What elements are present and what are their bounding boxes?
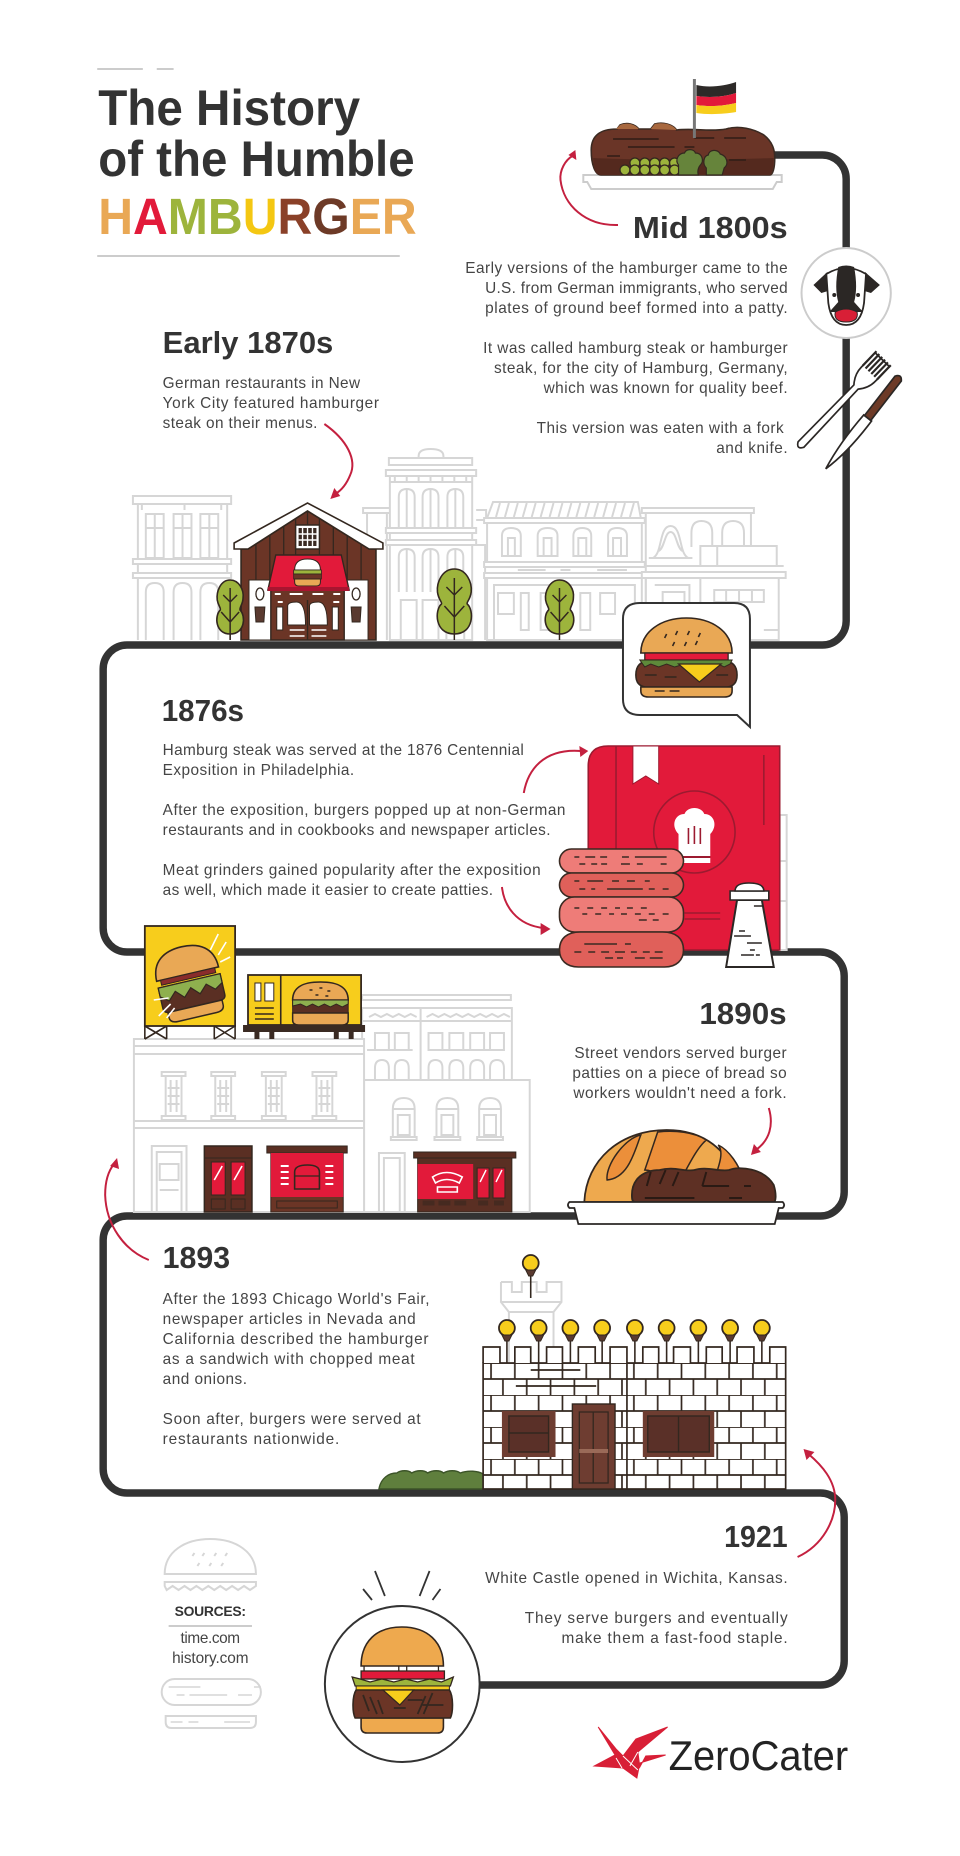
sources list: [172, 1630, 248, 1667]
icon: plate: [568, 1202, 784, 1224]
window: [296, 525, 319, 549]
title: [98, 80, 417, 245]
text: 1921 body: White Castle opened in Wichita, Kansas.: [485, 1570, 788, 1587]
illustration: storefronts, 1890s: [204, 1146, 516, 1212]
text: 1893 body: and onions.: [163, 1371, 247, 1388]
text: 1876s body: as well, which made it easier to create patties.: [163, 882, 493, 899]
speech bubble with burger: [623, 603, 750, 727]
arrow: to bread: [751, 1108, 771, 1155]
tower: [501, 1282, 561, 1362]
trees: [217, 569, 574, 640]
decorative top dashes: [97, 68, 174, 70]
text: Mid 1800s body: This version was eaten with a fork: [537, 420, 784, 437]
illustration: White Castle: [379, 1255, 786, 1489]
icon: crane: [594, 1727, 668, 1778]
icon: burger in circle with rays: [325, 1571, 480, 1762]
text: 1890s body: [572, 1045, 787, 1102]
text: 1876s body: Exposition in Philadelphia.: [163, 762, 354, 779]
text: 1893 body: California described the hamburger: [163, 1331, 429, 1348]
timeline path: [103, 155, 846, 1685]
text: Mid 1800s body: U.S. from German immigrants, who served: [485, 280, 788, 297]
storefront: red sign with door: [414, 1152, 516, 1212]
illustration: salt shaker: [726, 883, 774, 967]
text: 1876s body: [163, 742, 565, 899]
text: 1876s body: After the exposition, burgers popped up at non-German: [163, 802, 565, 819]
arrow: to storefronts: [105, 1158, 149, 1260]
arrow: to steak: [560, 150, 618, 225]
text: 1876s body: Hamburg steak was served at the 1876 Centennial: [163, 742, 524, 759]
text: 1890s body: workers wouldn't need a fork.: [572, 1085, 787, 1102]
text: 1893 body: Soon after, burgers were served at: [163, 1411, 421, 1428]
title word: HAMBURGER: HAMBURGER: [98, 188, 417, 245]
sources list: history.com: [172, 1650, 248, 1667]
illustration: patty on bread: [568, 1130, 784, 1224]
heading: 1921: 1921: [724, 1519, 788, 1554]
text: 1893 body: newspaper articles in Nevada and: [163, 1311, 416, 1328]
text: Early 1870s body: [163, 375, 379, 432]
entrance doors: [271, 590, 344, 640]
arrow: to castle: [798, 1449, 835, 1557]
text: 1921 body: make them a fast-food staple.: [561, 1630, 788, 1647]
title: of the Humble: [98, 131, 415, 187]
text: Mid 1800s body: It was called hamburg steak or hamburger: [483, 340, 788, 357]
arrow: to restaurant: [324, 424, 352, 499]
text: Early 1870s body: German restaurants in New: [163, 375, 361, 392]
text: Mid 1800s body: and knife.: [716, 440, 788, 457]
illustration: steak on plate with German flag: [583, 79, 782, 189]
logo: ZeroCater: [594, 1727, 848, 1779]
heading: 1890s: 1890s: [699, 996, 787, 1031]
text: Early 1870s body: York City featured hamburger: [163, 395, 379, 412]
text: 1921 body: They serve burgers and eventually: [525, 1610, 788, 1627]
icon: fork and knife: [791, 351, 904, 473]
text: 1893 body: as a sandwich with chopped meat: [163, 1351, 415, 1368]
text: 1890s body: Street vendors served burger: [574, 1045, 787, 1062]
icon: grey bun top: [165, 1539, 256, 1590]
text: Mid 1800s body: steak, for the city of Hamburg, Germany,: [494, 360, 788, 377]
text: 1876s body: restaurants and in cookbooks and newspaper articles.: [163, 822, 551, 839]
text: 1876s body: Meat grinders gained popularity after the exposition: [163, 862, 541, 879]
illustration: stack of patties: [559, 849, 683, 967]
heading: 1876s: 1876s: [162, 693, 244, 728]
icon: grey bun bottom: [162, 1679, 261, 1728]
icon: cow in circle: [802, 248, 891, 338]
heading: 1893: 1893: [163, 1240, 230, 1275]
icon: broccoli: [677, 150, 727, 175]
text: 1893 body: After the 1893 Chicago World's Fair,: [163, 1291, 430, 1308]
sources panel: [162, 1539, 261, 1728]
icon: plate: [583, 175, 782, 189]
billboard: yellow burger sign: [145, 926, 235, 1039]
icon: peas: [620, 158, 680, 175]
text: 1921 body: [485, 1570, 788, 1647]
infographic canvas: [97, 69, 904, 1779]
bush: [379, 1471, 483, 1489]
text: 1893 body: restaurants nationwide.: [163, 1431, 339, 1448]
illustration: red-awning restaurant: [234, 503, 383, 640]
text: Mid 1800s body: Early versions of the hamburger came to the: [465, 260, 788, 277]
storefront: door: [204, 1146, 252, 1212]
heading: Mid 1800s: Mid 1800s: [633, 210, 788, 245]
logo wordmark: ZeroCater: [669, 1732, 848, 1779]
windows and door: [502, 1404, 714, 1489]
text: Early 1870s body: steak on their menus.: [163, 415, 317, 432]
grey street buildings, early 1870s: [133, 449, 786, 640]
lamps and bins: [255, 588, 361, 622]
sources label: SOURCES:: [175, 1603, 246, 1619]
bulbs: [499, 1255, 770, 1363]
storefront: red window: [267, 1146, 347, 1212]
text: Mid 1800s body: which was known for quality beef.: [543, 380, 788, 397]
grey buildings, 1890s: [134, 995, 530, 1212]
text: Mid 1800s body: plates of ground beef formed into a patty.: [485, 300, 788, 317]
awning with burger: [268, 555, 349, 591]
text: 1893 body: [163, 1291, 430, 1448]
heading: Early 1870s: Early 1870s: [163, 325, 333, 360]
icon: flag: [694, 79, 736, 138]
sources list: time.com: [181, 1630, 240, 1647]
billboard: second burger sign: [243, 975, 365, 1039]
text: 1890s body: patties on a piece of bread so: [572, 1065, 787, 1082]
icon: chef hat: [674, 808, 714, 863]
illustration: red cookbook: [588, 746, 787, 950]
text: Mid 1800s body: [465, 260, 788, 457]
arrows: to cookbook and patties: [502, 746, 588, 935]
title: The History: [98, 80, 360, 136]
